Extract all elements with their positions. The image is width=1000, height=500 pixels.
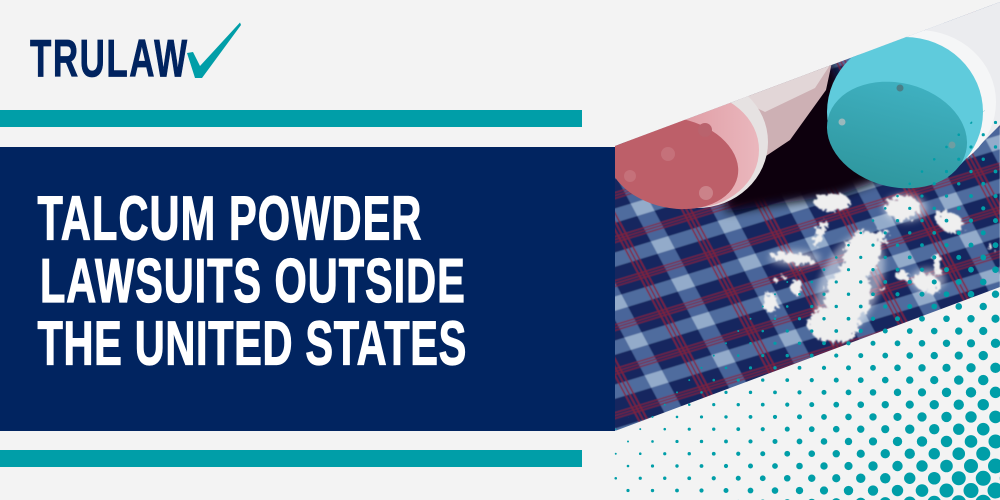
title line 2: LAWSUITS OUTSIDE [40, 247, 465, 316]
photo: talcum powder bottles on plaid fabric [599, 0, 1000, 440]
icon: check mark [187, 22, 241, 78]
logo: TruLaw wordmark with check [30, 22, 241, 88]
shadow beneath bottles [725, 60, 880, 212]
bottom teal bar [0, 450, 582, 467]
teal bottle [826, 2, 1000, 188]
powder haze [769, 194, 946, 347]
title line 1: TALCUM POWDER [38, 184, 421, 253]
title line 3: THE UNITED STATES [38, 309, 466, 378]
halftone dot pattern [614, 110, 1000, 500]
logo wordmark: TRULAW [30, 28, 188, 88]
spilled powder [763, 193, 993, 343]
title [38, 184, 466, 378]
plaid fabric [600, 0, 1000, 440]
pink bottle [615, 65, 832, 210]
top teal bar [0, 110, 582, 127]
navy title panel [0, 147, 615, 431]
